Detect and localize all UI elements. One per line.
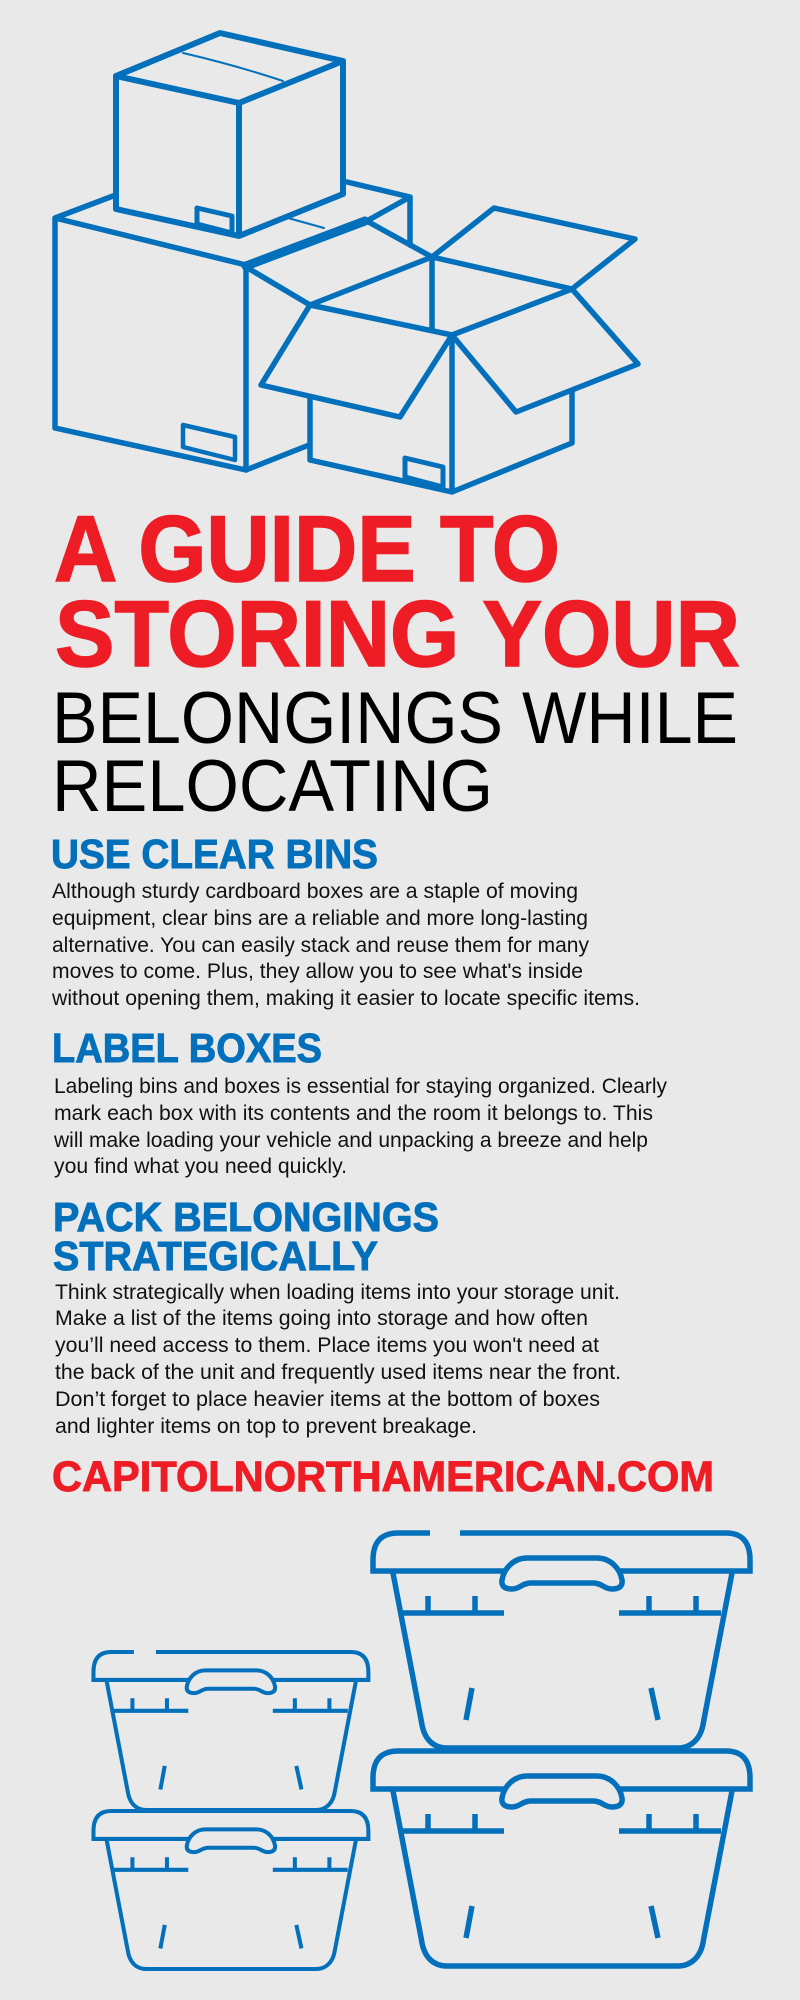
title: STORING YOUR [55, 581, 740, 686]
text block: label boxes: mark each box with its contents and the room it belongs to. This [54, 1101, 653, 1125]
text block: pack belongings strategically: you’ll need access to them. Place items you won't need at [55, 1333, 599, 1357]
heading: label boxes: LABEL BOXES [52, 1025, 322, 1071]
illustration: stacked cardboard boxes [55, 33, 638, 492]
panel: label boxes [52, 1025, 667, 1178]
heading: pack belongings strategically [53, 1194, 439, 1279]
text block: use clear bins: without opening them, making it easier to locate specific items. [51, 986, 640, 1010]
icon: open box [246, 208, 638, 492]
icon: small bottom bin [93, 1811, 368, 1969]
text block: pack belongings strategically: Make a list of the items going into storage and how often [55, 1306, 588, 1330]
text block: label boxes [53, 1074, 667, 1178]
text block: label boxes: Labeling bins and boxes is essential for staying organized. Clearly [54, 1074, 667, 1098]
text block: use clear bins: moves to come. Plus, they allow you to see what's inside [52, 959, 583, 983]
text block: label boxes: you find what you need quickly. [54, 1154, 347, 1178]
text block: use clear bins: equipment, clear bins are a reliable and more long-lasting [52, 906, 588, 930]
text block: pack belongings strategically: and lighter items on top to prevent breakage. [55, 1414, 477, 1438]
heading: pack belongings strategically: PACK BELONGINGS [53, 1194, 439, 1240]
illustration: stacked storage bins [93, 1533, 750, 1969]
text block: use clear bins: alternative. You can easily stack and reuse them for many [52, 933, 589, 957]
text block: pack belongings strategically: Don’t forget to place heavier items at the bottom of boxes [55, 1387, 600, 1411]
text block: label boxes: will make loading your vehicle and unpacking a breeze and help [53, 1128, 648, 1152]
icon: large bottom bin [373, 1751, 750, 1966]
text block: use clear bins: Although sturdy cardboard boxes are a staple of moving [52, 879, 578, 903]
text block: pack belongings strategically: the back of the unit and frequently used items near the front. [55, 1360, 621, 1384]
heading: use clear bins: USE CLEAR BINS [51, 831, 378, 877]
title [52, 496, 740, 827]
website url: CAPITOLNORTHAMERICAN.COM [52, 1453, 714, 1501]
title: A GUIDE TO [54, 496, 560, 601]
text block: use clear bins [51, 879, 640, 1010]
title: RELOCATING [52, 746, 493, 827]
icon: large top bin [373, 1533, 750, 1748]
icon: small top box [116, 33, 343, 236]
icon: small top bin [93, 1652, 368, 1810]
panel: use clear bins [51, 831, 640, 1010]
heading: pack belongings strategically: STRATEGICALLY [53, 1233, 378, 1279]
title: BELONGINGS WHILE [52, 678, 738, 759]
text block: pack belongings strategically: Think strategically when loading items into your storage unit. [55, 1280, 620, 1304]
panel: pack belongings strategically [53, 1194, 621, 1438]
icon: large back box [55, 182, 410, 470]
text block: pack belongings strategically [55, 1280, 621, 1438]
